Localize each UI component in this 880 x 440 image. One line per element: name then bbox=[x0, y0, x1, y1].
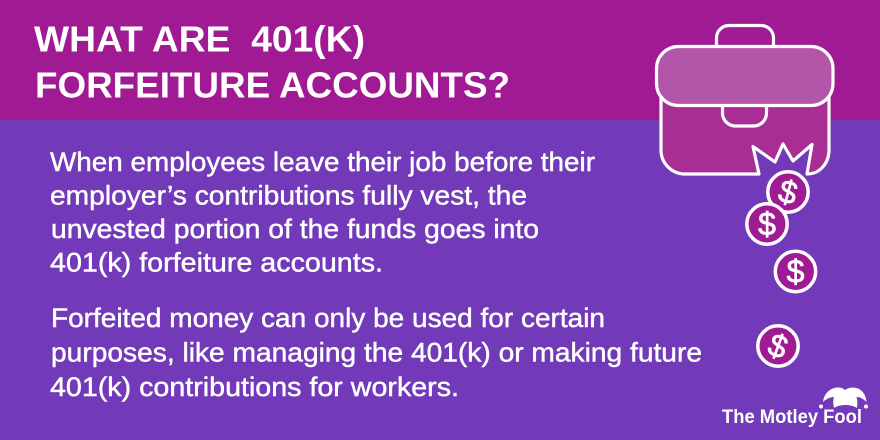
logo wordmark: The Motley Fool bbox=[722, 406, 862, 428]
briefcase flap bbox=[656, 46, 833, 106]
icon: coin 3: $ bbox=[787, 254, 805, 290]
title bbox=[34, 18, 510, 106]
briefcase body with torn corner bbox=[661, 92, 829, 174]
text block: vesting explanation: employer’s contributions fully vest, the bbox=[50, 180, 527, 210]
text block: permitted uses: Forfeited money can only be used for certain bbox=[51, 303, 605, 333]
title: FORFEITURE ACCOUNTS? bbox=[35, 64, 510, 106]
icon: coin 3 bbox=[775, 251, 816, 292]
text block: vesting explanation: unvested portion of the funds goes into bbox=[51, 214, 539, 244]
icon: coin 1: $ bbox=[775, 172, 801, 212]
icon: coin 2 bbox=[747, 204, 787, 244]
text block: vesting explanation bbox=[50, 147, 595, 278]
briefcase handle bbox=[716, 26, 774, 47]
text block: vesting explanation: When employees leave their job before their bbox=[50, 147, 595, 177]
text block: permitted uses bbox=[50, 303, 702, 402]
icon: coin 4: $ bbox=[763, 326, 793, 366]
logo jester hat bbox=[819, 388, 868, 408]
icon: torn briefcase bbox=[656, 26, 833, 174]
briefcase clasp bbox=[722, 105, 766, 126]
logo: The Motley Fool bbox=[722, 388, 868, 428]
title: WHAT ARE 401(K) bbox=[34, 18, 365, 60]
text block: permitted uses: 401(k) contributions for workers. bbox=[50, 372, 459, 402]
text block: vesting explanation: 401(k) forfeiture accounts. bbox=[50, 248, 383, 278]
panel: background bbox=[0, 120, 880, 440]
icon: coin 2: $ bbox=[758, 206, 776, 242]
panel: header band bbox=[0, 0, 880, 120]
icon: coin 1 bbox=[768, 172, 808, 212]
text block: permitted uses: purposes, like managing the 401(k) or making future bbox=[51, 338, 702, 368]
